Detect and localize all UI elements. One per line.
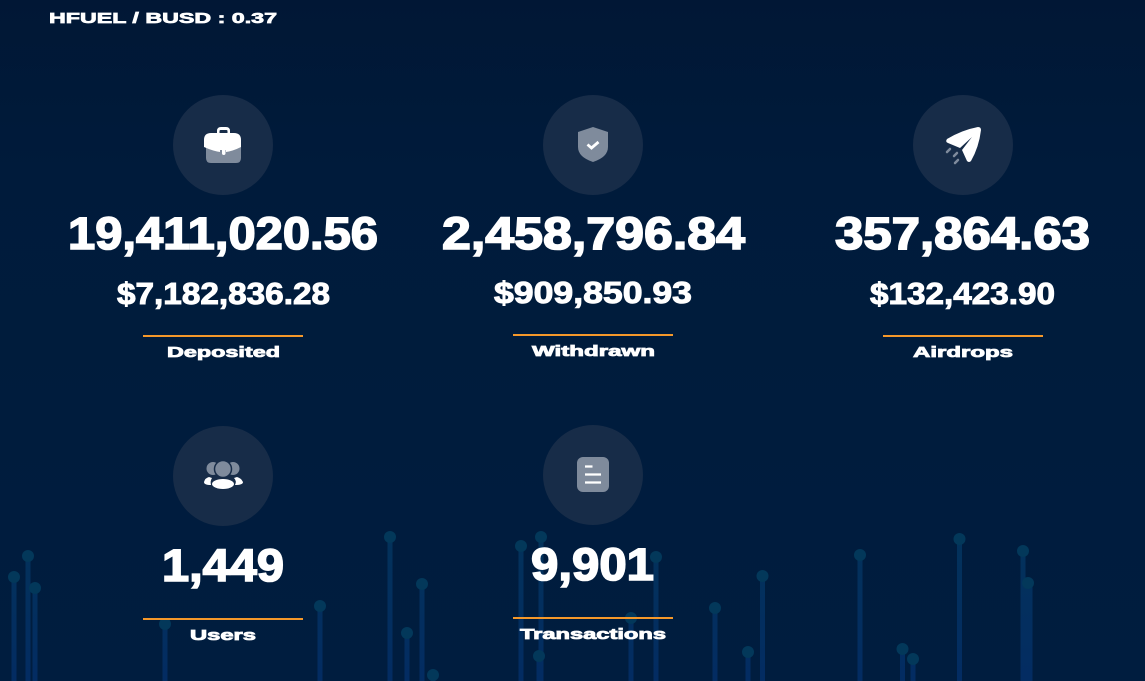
label: transactions: Transactions: [520, 626, 666, 643]
icon: users: [173, 426, 273, 526]
label: airdrops: Airdrops: [913, 344, 1013, 361]
value: deposited USD: $7,182,836.28: [117, 276, 330, 311]
label: users: Users: [190, 627, 256, 644]
label: deposited: Deposited: [167, 344, 280, 361]
icon: shield: [543, 95, 643, 195]
value: airdrops HFUEL: 357,864.63: [835, 208, 1090, 259]
price ticker: HFUEL / BUSD : 0.37: [49, 10, 277, 27]
value: deposited HFUEL: 19,411,020.56: [68, 208, 378, 259]
icon: document: [543, 425, 643, 525]
icon: briefcase: [173, 95, 273, 195]
panel: deposited: [68, 95, 378, 361]
value: withdrawn USD: $909,850.93: [494, 275, 692, 310]
value: users: 1,449: [162, 540, 284, 591]
value: airdrops USD: $132,423.90: [870, 276, 1055, 311]
panel: users: [143, 426, 303, 644]
label: withdrawn: Withdrawn: [532, 343, 655, 360]
panel: airdrops: [835, 95, 1090, 361]
panel: withdrawn: [442, 95, 745, 360]
panel: transactions: [513, 425, 673, 643]
background pins: [8, 531, 1034, 681]
value: transactions: 9,901: [531, 539, 654, 590]
icon: paper plane: [913, 95, 1013, 195]
value: withdrawn HFUEL: 2,458,796.84: [442, 208, 745, 259]
